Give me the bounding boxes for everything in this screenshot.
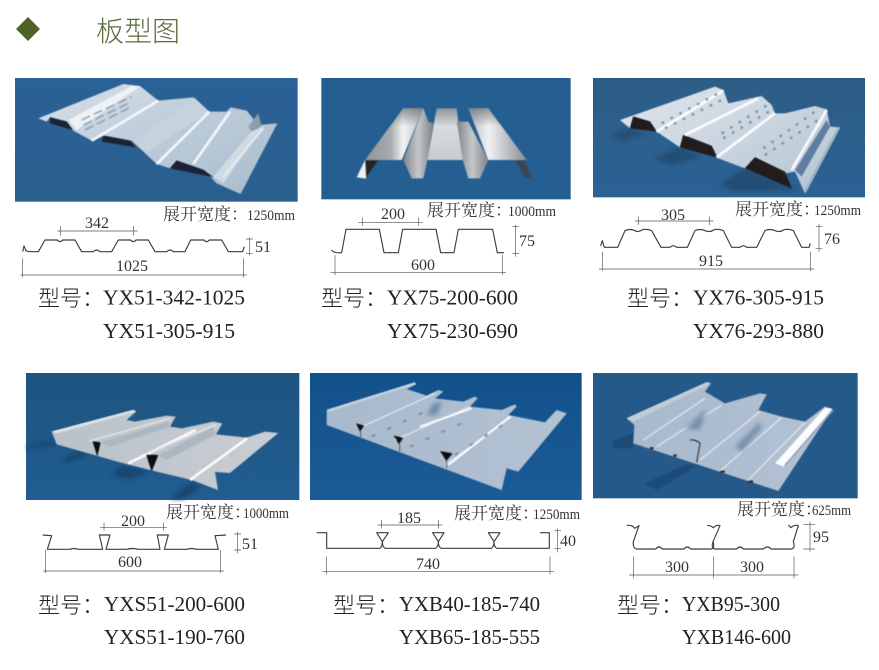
dimension labels: 40 xyxy=(560,533,576,550)
dimension labels: 1025 xyxy=(116,258,148,275)
model numbers: 型号： xyxy=(617,593,683,618)
model numbers: YXB65-185-555 xyxy=(399,625,540,649)
dimension labels: 95 xyxy=(813,529,829,546)
dimension labels: 600 xyxy=(411,257,435,274)
dimension labels xyxy=(661,207,840,270)
unfolded width label: 1250mm xyxy=(533,507,580,523)
unfolded width label xyxy=(454,504,580,523)
unfolded width label xyxy=(166,503,289,522)
profile diagram xyxy=(43,523,241,573)
unfolded width label: 展开宽度： xyxy=(166,503,251,522)
dimension labels: 51 xyxy=(242,536,258,553)
model numbers: YXB40-185-740 xyxy=(399,592,540,616)
profile diagram xyxy=(317,520,561,574)
photo: YX51 deck sheet xyxy=(15,78,298,202)
model numbers: YXB95-300 xyxy=(682,592,780,616)
model numbers: 型号： xyxy=(333,593,399,618)
dimension labels xyxy=(397,510,576,573)
model numbers xyxy=(627,286,824,343)
dimension labels: 300 xyxy=(740,559,764,576)
model numbers xyxy=(321,286,518,343)
model numbers: YX51-342-1025 xyxy=(103,286,245,310)
dimension labels: 200 xyxy=(121,513,145,530)
dimension labels xyxy=(85,215,271,275)
dimension labels: 600 xyxy=(118,554,142,571)
dimension labels xyxy=(381,206,535,274)
dimension labels: 740 xyxy=(416,556,440,573)
dimension labels: 305 xyxy=(661,207,685,224)
dimension labels: 300 xyxy=(665,559,689,576)
unfolded width label: 1250mm xyxy=(247,208,295,224)
unfolded width label: 展开宽度： xyxy=(737,500,822,519)
unfolded width label: 625mm xyxy=(812,503,851,519)
unfolded width label: 1000mm xyxy=(508,204,556,220)
model numbers: YXS51-200-600 xyxy=(104,592,245,616)
unfolded width label: 展开宽度： xyxy=(735,200,820,219)
panel: YX75 xyxy=(321,78,571,343)
model numbers: 型号： xyxy=(38,593,104,618)
model numbers: YXS51-190-760 xyxy=(104,625,245,649)
photo: YX76 deck sheet xyxy=(593,78,865,197)
model numbers: YX75-230-690 xyxy=(387,319,518,343)
model numbers: YX76-293-880 xyxy=(693,319,824,343)
model numbers xyxy=(617,592,791,649)
unfolded width label xyxy=(427,201,556,220)
dimension labels: 76 xyxy=(824,231,840,248)
profile diagram xyxy=(331,218,519,275)
title: 板型图 xyxy=(96,16,180,47)
icon: diamond bullet xyxy=(16,17,40,41)
dimension labels: 200 xyxy=(381,206,405,223)
photo: YXB95 deck sheet xyxy=(593,373,858,498)
model numbers: YX51-305-915 xyxy=(103,319,235,343)
photo: YXS51 deck sheet xyxy=(26,373,299,500)
profile diagram xyxy=(599,217,822,271)
model numbers: 型号： xyxy=(38,286,104,311)
unfolded width label: 展开宽度： xyxy=(163,205,248,224)
unfolded width label xyxy=(735,200,861,219)
profile diagram xyxy=(627,522,815,578)
model numbers xyxy=(38,286,245,343)
profile diagram xyxy=(21,226,253,277)
dimension labels: 75 xyxy=(519,233,535,250)
panel: YXB40 xyxy=(310,373,582,649)
model numbers xyxy=(38,592,245,649)
model numbers: 型号： xyxy=(321,286,387,311)
panel: YX76 xyxy=(593,78,865,343)
unfolded width label: 1000mm xyxy=(243,506,289,522)
dimension labels: 915 xyxy=(699,253,723,270)
panel: YXB95 xyxy=(593,373,858,649)
model numbers: YX76-305-915 xyxy=(693,286,824,310)
unfolded width label: 展开宽度： xyxy=(427,201,512,220)
dimension labels xyxy=(118,513,258,571)
unfolded width label: 展开宽度： xyxy=(454,504,539,523)
panel: YX51 xyxy=(15,78,298,343)
dimension labels: 51 xyxy=(255,239,271,256)
dimension labels: 185 xyxy=(397,510,421,527)
model numbers xyxy=(333,592,540,649)
model numbers: 型号： xyxy=(627,286,693,311)
dimension labels: 342 xyxy=(85,215,109,232)
model numbers: YXB146-600 xyxy=(682,625,791,649)
photo: YXB40 deck sheet xyxy=(310,373,582,500)
panel: YXS51 xyxy=(26,373,299,649)
unfolded width label xyxy=(163,205,295,224)
unfolded width label: 1250mm xyxy=(814,203,861,219)
model numbers: YX75-200-600 xyxy=(387,286,518,310)
dimension labels xyxy=(665,529,829,576)
photo: YX75 deck sheet xyxy=(321,78,571,199)
